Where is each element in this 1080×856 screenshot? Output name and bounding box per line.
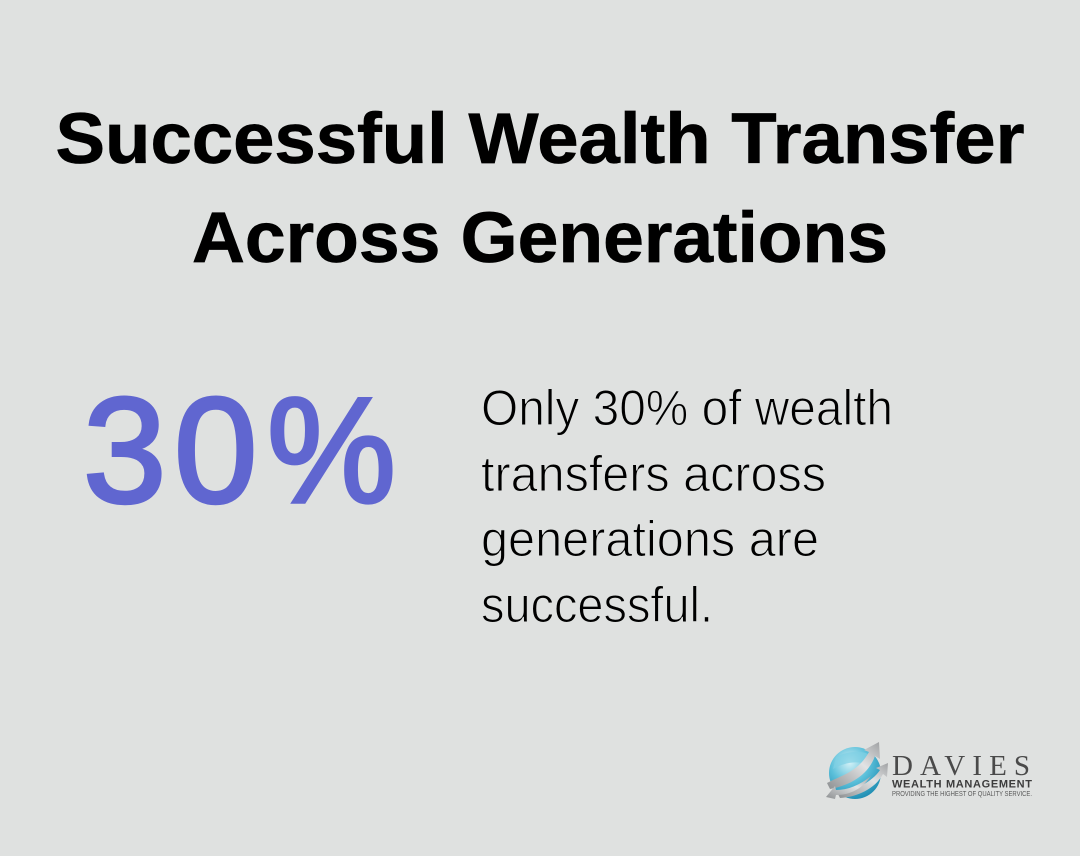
icon: globe with arrows: [826, 742, 888, 799]
logo: Davies Wealth Management: [826, 742, 1032, 799]
statistic description: transfers across: [481, 446, 826, 502]
big statistic: 30%: [83, 366, 396, 534]
title: Successful Wealth Transfer: [56, 100, 1024, 179]
title: Across Generations: [192, 199, 888, 278]
big statistic: 30%: %: [267, 366, 396, 534]
statistic description: generations are: [481, 511, 819, 567]
statistic description: [481, 380, 893, 633]
logo subtitle: WEALTH MANAGEMENT: [892, 778, 1032, 790]
title: [56, 100, 1024, 278]
logo tagline: PROVIDING THE HIGHEST OF QUALITY SERVICE.: [892, 791, 1032, 798]
big statistic: 30%: 30: [83, 366, 257, 534]
logo wordmark: DAVIES: [892, 750, 1030, 782]
statistic description: successful.: [481, 577, 713, 633]
statistic description: Only 30% of wealth: [481, 380, 893, 436]
